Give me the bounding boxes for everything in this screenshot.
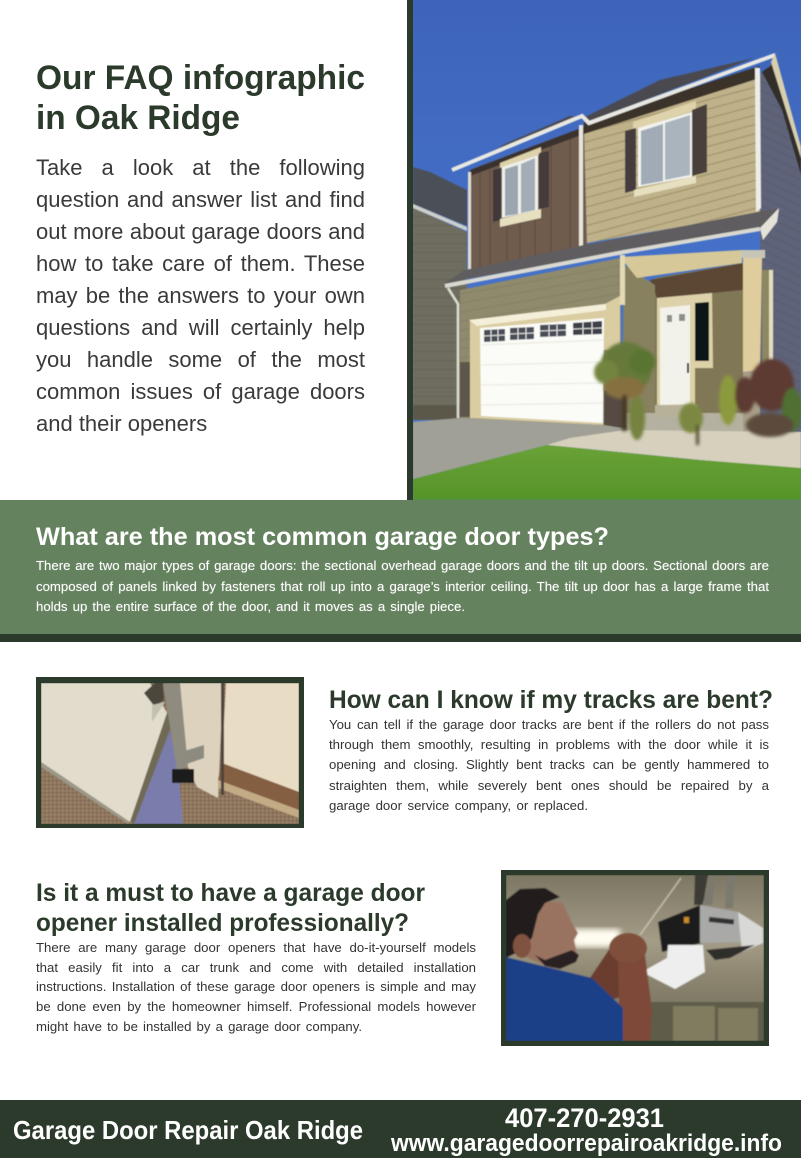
intro paragraph: may be the answers to your own: [36, 283, 365, 308]
answer text: garage door service company, or replaced.: [329, 798, 588, 813]
heading: [36, 879, 425, 937]
upper right window: [625, 101, 707, 197]
photo: bent garage door track: [36, 677, 304, 828]
footer bar: [0, 1100, 801, 1158]
intro paragraph: and their openers: [36, 411, 207, 436]
company name and contact details: 407-270-2931: [505, 1103, 664, 1133]
title: in Oak Ridge: [36, 99, 240, 137]
heading: How can I know if my tracks are bent?: [329, 686, 773, 714]
answer text: straighten them, while severely bent ones should be repaired by a: [329, 778, 769, 793]
heading: opener installed professionally?: [36, 909, 409, 937]
intro paragraph: questions and will certainly help: [36, 315, 365, 340]
upper left window: [493, 147, 549, 227]
company name and contact details: [13, 1103, 782, 1157]
answer text: instructions. Installation of these garage door openers is simple and may: [36, 979, 476, 994]
answer text: opening and closing. Slightly bent tracks can be gently hammered to: [329, 757, 769, 772]
question: professional opener installation: [36, 879, 476, 1034]
heading: What are the most common garage door types?: [36, 523, 609, 551]
garage door panel: [41, 683, 167, 822]
upper roof: [470, 58, 754, 164]
answer text: holds up the entire surface of the door, and it moves as a single piece.: [36, 599, 465, 614]
porch walls: [620, 250, 773, 420]
light cover: [642, 945, 705, 989]
roller bracket: [181, 745, 204, 765]
panel: most common garage door types: [0, 500, 801, 642]
porch column: [741, 250, 765, 433]
stone pier: [604, 390, 626, 428]
intro paragraph: common issues of garage doors: [36, 379, 365, 404]
answer text: [36, 940, 476, 1034]
baseboard: [218, 763, 299, 810]
garage door with trim: [469, 296, 620, 425]
shrubs: [594, 342, 801, 445]
intro paragraph: [36, 155, 365, 436]
answer text: that easily fit into a car trunk and come with detailed installation: [36, 960, 476, 975]
company name and contact details: Garage Door Repair Oak Ridge: [13, 1115, 363, 1145]
question: bent tracks: [329, 686, 773, 813]
front door with sidelight: [655, 293, 713, 417]
title: [36, 59, 365, 137]
intro paragraph: out more about garage doors and: [36, 219, 365, 244]
answer text: composed of panels linked by fasteners that roll up into a garage’s interior ceiling. The tilt up door has a large frame that: [36, 579, 769, 594]
panel: house photo with dark divider: [407, 0, 801, 500]
photo: house with white garage door: [413, 0, 801, 500]
intro paragraph: Take a look at the following: [36, 155, 365, 180]
ceiling lamp: [572, 929, 620, 947]
answer text: through them smoothly, resulting in problems with the door while it is: [329, 737, 769, 752]
answer text: You can tell if the garage door tracks are bent if the rollers do not pass: [329, 717, 769, 732]
intro paragraph: how to take care of them. These: [36, 251, 365, 276]
right side wall: [760, 60, 801, 445]
blue gap: [134, 730, 183, 824]
answer text: be done even by the homeowner himself. Professional models however: [36, 999, 476, 1014]
lawn: [413, 445, 801, 500]
garage wall: [460, 258, 622, 430]
gutters and fascia: [452, 53, 801, 272]
answer text: [329, 717, 769, 813]
drain pipe and stone: [448, 288, 471, 418]
intro paragraph: question and answer list and find: [36, 187, 365, 212]
answer text: There are many garage door openers that have do-it-yourself models: [36, 940, 476, 955]
opener rail: [640, 875, 735, 935]
beige siding wall: [584, 73, 760, 243]
answer text: There are two major types of garage doors: the sectional overhead garage doors and the tilt up doors. Sectional doors are: [36, 558, 769, 573]
lower roof: [445, 208, 779, 283]
gravel bed: [547, 430, 801, 469]
photo: technician installing opener: [501, 870, 769, 1046]
garage wall cabinets: [650, 1002, 764, 1041]
steel track: [163, 683, 188, 770]
intro paragraph: you handle some of the most: [36, 347, 365, 372]
jamb: [180, 683, 223, 798]
right wall: [222, 683, 299, 792]
technician: [506, 888, 652, 1041]
driveway: [413, 418, 640, 479]
porch slab: [620, 413, 760, 440]
panel: intro title and text: [36, 59, 365, 436]
heading: Is it a must to have a garage door: [36, 879, 425, 907]
company name and contact details: www.garagedoorrepairoakridge.info: [390, 1130, 782, 1157]
answer text: [36, 558, 770, 614]
title: Our FAQ infographic: [36, 59, 365, 97]
answer text: might have to be installed by a garage door company.: [36, 1019, 362, 1034]
brown board wall: [470, 127, 587, 275]
neighbour house: [413, 167, 467, 420]
opener motor unit: [658, 905, 763, 960]
